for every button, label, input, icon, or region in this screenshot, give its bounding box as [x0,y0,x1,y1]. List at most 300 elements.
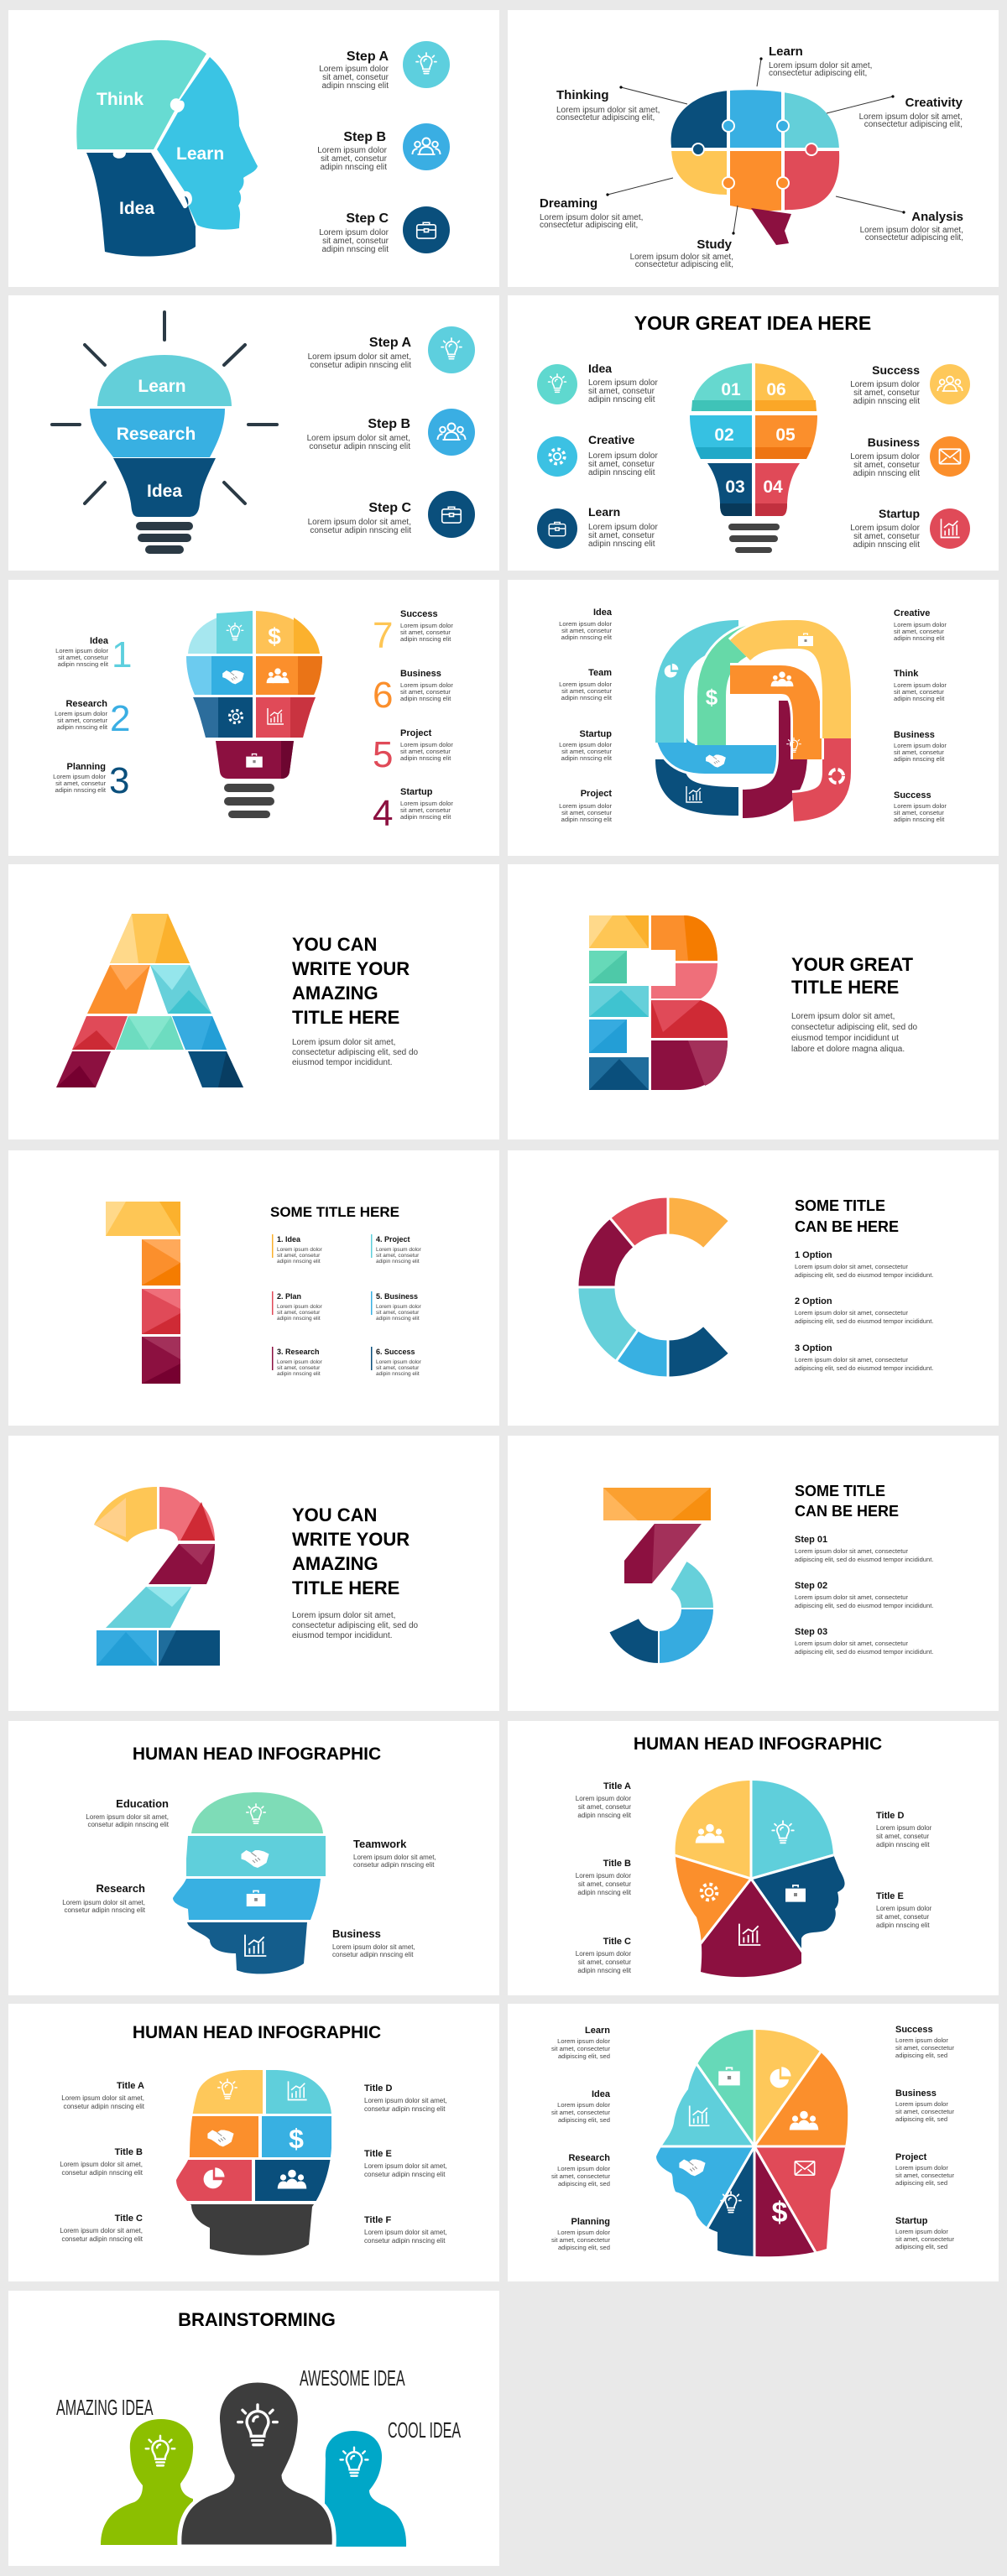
labels right: Business [894,730,935,740]
bulb rays [52,312,277,503]
labels left: adipin nnscing elit [577,1889,632,1896]
item 7 Success: adipin nnscing elit [400,635,451,643]
headline: YOU CAN [292,1504,377,1525]
label: Thinking: consectetur adipiscing elit, [556,113,655,123]
labels right: sit amet, consetur [894,688,944,696]
label: Dreaming: consectetur adipiscing elit, [540,221,638,230]
item 3 Planning: 3 [109,760,129,801]
label Research: Research [96,1882,145,1895]
step A: Lorem ipsum dolor sit amet, [308,352,411,362]
step C: Step C [346,211,389,226]
labels right: sit amet, consectetur [895,2108,955,2115]
label: Study: Study [697,237,733,252]
steps: Step 03 [795,1627,827,1637]
options: adipiscing elit, sed do eiusmod tempor incididunt. [795,1317,933,1325]
item 4 Startup: adipin nnscing elit [400,813,451,821]
list items: Lorem ipsum dolor [376,1247,422,1253]
labels left: Title B [115,2147,143,2157]
panel: letter A [8,864,499,1139]
item 2 Research: 2 [110,698,130,739]
tiled bulb: $ [268,623,281,649]
headline: TITLE HERE [292,1577,399,1598]
numbered bulb: 02 [714,425,734,445]
label Business: Lorem ipsum dolor sit amet, [332,1943,415,1951]
labels left: sit amet, consectetur [551,2236,610,2244]
list items: adipin nnscing elit [277,1259,321,1265]
labels left: adipin nnscing elit [577,1812,632,1819]
item 3 Planning: sit amet, consetur [55,780,106,787]
steps: Lorem ipsum dolor sit amet, consectetur [795,1547,909,1555]
labels left: Lorem ipsum dolor [557,2229,610,2236]
head pie [675,1781,845,1977]
list items: adipin nnscing elit [277,1316,321,1322]
label: Dreaming: Lorem ipsum dolor sit amet, [540,213,643,222]
list items: sit amet, consetur [376,1310,420,1316]
list items: 5. Business [376,1292,418,1301]
label Education: consetur adipin nnscing elit [87,1821,170,1828]
labels left: Lorem ipsum dolor [576,1795,631,1802]
labels left: Lorem ipsum dolor [559,741,612,748]
labels right: Lorem ipsum dolor [894,742,947,749]
labels left: adipin nnscing elit [561,694,613,701]
item 1 Idea: 1 [112,634,132,675]
item 6 Business: sit amet, consetur [400,688,451,696]
label: Thinking [556,86,687,123]
steps: adipiscing elit, sed do eiusmod tempor incididunt. [795,1556,933,1563]
labels left: adipin nnscing elit [561,816,613,823]
body text: consectetur adipiscing elit, sed do [791,1023,918,1032]
list items: Lorem ipsum dolor [277,1304,323,1310]
item 6 Business: 6 [373,675,393,716]
headline: TITLE HERE [292,1007,399,1028]
labels left: sit amet, consetur [578,1803,631,1811]
labels left: Team [588,668,612,678]
labels left: adipin nnscing elit [561,754,613,762]
labels left: Idea [592,2089,611,2099]
body text: Lorem ipsum dolor sit amet, [292,1611,395,1620]
list items: adipin nnscing elit [376,1371,420,1377]
letter A mosaic [56,914,243,1087]
list items: sit amet, consetur [277,1310,321,1316]
title: YOUR GREAT IDEA HERE [634,312,871,334]
labels right: Lorem ipsum dolor [894,681,947,689]
bulb: Research [117,425,196,444]
label: Creativity: consectetur adipiscing elit, [864,120,963,129]
body text: Lorem ipsum dolor sit amet, [791,1012,895,1021]
labels right: Think [894,669,919,679]
step A: consetur adipin nnscing elit [310,361,411,370]
options: Lorem ipsum dolor sit amet, consectetur [795,1263,909,1270]
item 6 Business: adipin nnscing elit [400,695,451,702]
headline: YOU CAN [292,934,377,955]
body text [292,1611,419,1640]
item 1 Idea: adipin nnscing elit [58,660,109,668]
labels right: Lorem ipsum dolor [895,2164,948,2172]
headline: CAN BE HERE [795,1503,899,1520]
item: Idea: adipin nnscing elit [588,395,655,404]
labels left: sit amet, consetur [578,1958,631,1966]
labels left: Startup [579,729,612,739]
bulb [90,355,232,554]
labels left: adipiscing elit, sed [558,2116,610,2124]
item 5 Project: sit amet, consetur [400,748,451,755]
body text: labore et dolore magna aliqua. [791,1045,905,1054]
body text: eiusmod tempor incididunt. [292,1631,393,1640]
list items: sit amet, consetur [376,1365,420,1371]
labels right: adipin nnscing elit [894,816,945,823]
item: Learn: adipin nnscing elit [588,540,655,549]
item 1 Idea: Lorem ipsum dolor [55,647,108,654]
labels left: Lorem ipsum dolor sit amet, [61,2094,144,2102]
step C: adipin nnscing elit [322,245,389,254]
head puzzle [76,40,258,257]
labels right: Project [895,2152,927,2162]
item: Startup: Startup [879,507,920,520]
label Teamwork: Lorem ipsum dolor sit amet, [353,1854,436,1861]
label: Creativity: Lorem ipsum dolor sit amet, [859,112,963,122]
number 1 mosaic [106,1202,180,1384]
options: Lorem ipsum dolor sit amet, consectetur [795,1356,909,1364]
label: Thinking: Lorem ipsum dolor sit amet, [556,106,660,115]
labels left: Title B [603,1859,631,1869]
labels left: adipiscing elit, sed [558,2180,610,2188]
item 7 Success: 7 [373,615,393,656]
list items: sit amet, consetur [277,1365,321,1371]
list items: Lorem ipsum dolor [277,1359,323,1365]
head pie [656,2030,848,2257]
label: Analysis: Analysis [911,210,963,224]
labels left: Title C [115,2214,143,2224]
labels left: Lorem ipsum dolor [576,1872,631,1880]
item: Business: Business [868,435,920,449]
headline [795,1483,899,1520]
item 6 Business: Lorem ipsum dolor [400,681,453,689]
item 5 Project: 5 [373,734,393,775]
labels right: Business [895,2088,937,2099]
title: HUMAN HEAD INFOGRAPHIC [133,2023,381,2042]
labels right: Lorem ipsum dolor [876,1824,932,1832]
bulb: Learn [138,377,186,396]
list items: sit amet, consetur [277,1253,321,1259]
labels right: sit amet, consetur [876,1833,929,1840]
labels right: sit amet, consetur [894,748,944,756]
panel: human head bands [8,1721,499,1995]
step A: sit amet, consetur [322,73,389,82]
label: awesome idea: AWESOME IDEA [300,2365,405,2391]
options: adipiscing elit, sed do eiusmod tempor incididunt. [795,1364,933,1372]
labels right: adipiscing elit, sed [895,2243,947,2250]
steps: Step 01 [795,1535,827,1545]
list items: Lorem ipsum dolor [376,1304,422,1310]
step C: sit amet, consetur [322,237,389,246]
labels left [551,2026,611,2251]
item 7 Success: sit amet, consetur [400,628,451,636]
item 4 Startup: Lorem ipsum dolor [400,800,453,807]
labels right: Creative [894,608,930,618]
headline [795,1197,899,1235]
title: SOME TITLE HERE [270,1204,399,1220]
labels left [559,607,613,823]
labels left: consetur adipin nnscing elit [61,2169,143,2177]
item: Learn: Learn [588,505,620,519]
labels left: Lorem ipsum dolor [557,2037,610,2045]
item 4 Startup: 4 [373,793,393,834]
letter B mosaic [589,915,728,1090]
labels right [894,608,947,823]
labels right [895,2025,955,2250]
labels right: Lorem ipsum dolor sit amet, [364,2097,447,2104]
labels left: sit amet, consectetur [551,2045,610,2052]
head: dark [180,2380,334,2547]
label Education: Education [116,1797,169,1810]
labels right: Success [895,2025,933,2035]
labels right [876,1811,932,1929]
label Teamwork: Teamwork [353,1838,407,1850]
labels right: Title D [364,2083,392,2094]
labels right: Lorem ipsum dolor [894,621,947,628]
headline: AMAZING [292,983,378,1004]
item: Learn [537,505,658,549]
steps: Lorem ipsum dolor sit amet, consectetur [795,1640,909,1647]
item 4 Startup: Startup [400,787,433,797]
panel: letter B [508,864,999,1139]
panel: number 1 [8,1150,499,1426]
item: Learn: Lorem ipsum dolor [588,523,658,532]
labels left: sit amet, consetur [561,627,612,634]
labels right: Title F [364,2215,391,2225]
label: amazing idea: AMAZING IDEA [56,2395,154,2420]
labels right: adipin nnscing elit [894,755,945,763]
panel: woven knot [508,580,999,856]
item: Idea: Idea [588,362,612,375]
label: Analysis: consectetur adipiscing elit, [865,233,963,242]
step B: adipin nnscing elit [321,163,387,172]
number 2 mosaic [94,1487,220,1666]
label Teamwork [353,1838,436,1869]
labels right: sit amet, consetur [894,809,944,816]
panel: human head grid [8,2004,499,2281]
item 7 Success: Success [400,609,438,619]
labels right: Lorem ipsum dolor [876,1905,932,1912]
label: Study [630,206,738,269]
labels right: Lorem ipsum dolor [895,2228,948,2235]
labels left: Lorem ipsum dolor [559,620,612,628]
labels left: adipin nnscing elit [561,634,613,641]
labels left: Title A [603,1781,631,1791]
label: Thinking: Thinking [556,88,609,102]
steps: Lorem ipsum dolor sit amet, consectetur [795,1593,909,1601]
step C: Lorem ipsum dolor sit amet, [308,518,411,527]
labels right [364,2083,447,2245]
panel: letter C [508,1150,999,1426]
steps: adipiscing elit, sed do eiusmod tempor incididunt. [795,1648,933,1656]
panel: your great idea bulb [508,295,999,571]
item 7 Success: Lorem ipsum dolor [400,622,453,629]
item: Success: Success [872,363,920,377]
list items: 6. Success [376,1348,415,1356]
labels left: Project [581,789,612,799]
bulb: Idea [147,482,182,501]
headline [292,934,410,1028]
head: green [101,2419,193,2545]
label: cool idea: COOL IDEA [388,2417,462,2443]
labels right: sit amet, consectetur [895,2235,955,2243]
body text: eiusmod tempor incididunt ut [791,1034,899,1043]
labels right: adipiscing elit, sed [895,2115,947,2123]
body text [791,1012,918,1054]
headline: TITLE HERE [791,977,899,998]
item: Success: adipin nnscing elit [853,397,920,406]
item 5 Project [373,728,453,775]
item: Creative: Lorem ipsum dolor [588,451,658,461]
numbered bulb: 03 [725,477,745,497]
labels right: adipin nnscing elit [894,695,945,702]
body text: Lorem ipsum dolor sit amet, [292,1038,395,1047]
letter C ring [577,1197,730,1378]
step A: adipin nnscing elit [322,81,389,91]
labels left: sit amet, consectetur [551,2172,610,2180]
labels left: sit amet, consectetur [551,2109,610,2116]
item 3 Planning [53,760,129,801]
item 2 Research: sit amet, consetur [57,717,107,724]
headline: WRITE YOUR [292,1529,410,1550]
labels right: Title D [876,1811,904,1821]
item 1 Idea: Idea [90,636,109,646]
labels right: Title E [364,2149,392,2159]
head: blue [324,2431,406,2547]
item: Startup: Lorem ipsum dolor [850,524,921,533]
list items: adipin nnscing elit [376,1316,420,1322]
label Business: Business [332,1927,381,1940]
numbered bulb: 01 [721,380,741,399]
list items: Lorem ipsum dolor [277,1247,323,1253]
options: 1 Option [795,1250,832,1260]
item: Success: sit amet, consetur [853,388,921,398]
labels left: sit amet, consetur [561,687,612,695]
item 5 Project: Project [400,728,432,738]
item: Learn: sit amet, consetur [588,531,655,540]
item 3 Planning: Lorem ipsum dolor [53,773,106,780]
number 3 mosaic [603,1488,714,1664]
labels right: adipiscing elit, sed [895,2179,947,2187]
item 3 Planning: adipin nnscing elit [55,786,107,794]
panel: seven step bulb [8,580,499,856]
item: Business: Lorem ipsum dolor [850,452,921,461]
labels left: Lorem ipsum dolor sit amet, [60,2161,143,2168]
options: Lorem ipsum dolor sit amet, consectetur [795,1309,909,1317]
head grid [176,2070,331,2255]
numbered bulb: 05 [775,425,796,445]
body text: consectetur adipiscing elit, sed do [292,1621,419,1630]
headline: SOME TITLE [795,1483,885,1499]
label: Study: Lorem ipsum dolor sit amet, [630,253,733,262]
head puzzle: Learn [176,144,224,164]
label Education: Lorem ipsum dolor sit amet, [86,1813,169,1821]
headline: YOUR GREAT [791,954,914,975]
labels left: consetur adipin nnscing elit [63,2103,145,2110]
labels left: Title C [603,1937,631,1947]
labels left: consetur adipin nnscing elit [61,2235,143,2243]
label: Learn: Learn [769,44,803,59]
label Research: Lorem ipsum dolor sit amet, [62,1899,145,1906]
panel: human head eight wedges [508,2004,999,2281]
headline: CAN BE HERE [795,1218,899,1235]
label Business: consetur adipin nnscing elit [332,1951,414,1958]
numbered bulb: 06 [766,380,786,399]
list items [272,1234,422,1377]
item 6 Business [373,669,453,716]
body text: consectetur adipiscing elit, sed do [292,1048,419,1057]
labels right: Startup [895,2216,928,2226]
labels right: Lorem ipsum dolor sit amet, [364,2229,447,2236]
list items: adipin nnscing elit [376,1259,420,1265]
list items: Lorem ipsum dolor [376,1359,422,1365]
step A: Lorem ipsum dolor [319,65,389,74]
labels left: sit amet, consetur [578,1880,631,1888]
step B: Step B [368,417,410,431]
labels right: Lorem ipsum dolor sit amet, [364,2162,447,2170]
steps: adipiscing elit, sed do eiusmod tempor incididunt. [795,1602,933,1609]
title: BRAINSTORMING [178,2309,336,2330]
labels left: sit amet, consetur [561,748,612,755]
options: adipiscing elit, sed do eiusmod tempor incididunt. [795,1271,933,1279]
labels right: Lorem ipsum dolor [895,2100,948,2108]
labels left: sit amet, consetur [561,809,612,816]
step B: Lorem ipsum dolor sit amet, [307,434,410,443]
item: Business [850,435,970,478]
labels right: consetur adipin nnscing elit [364,2105,446,2113]
step C [308,491,475,538]
item 1 Idea: sit amet, consetur [58,654,108,661]
item 2 Research: Research [65,699,107,709]
item: Creative: sit amet, consetur [588,460,655,469]
options: 2 Option [795,1296,832,1306]
knot icons: $ [706,685,718,710]
labels right: consetur adipin nnscing elit [364,2171,446,2178]
item 2 Research [55,698,130,739]
body text: eiusmod tempor incididunt. [292,1058,393,1067]
labels left: Title A [117,2081,144,2091]
item 5 Project: adipin nnscing elit [400,754,451,762]
panel: light bulb steps [8,295,499,571]
item: Business: adipin nnscing elit [853,469,920,478]
body text [292,1038,419,1067]
step A [319,41,450,91]
labels left: Lorem ipsum dolor sit amet, [60,2227,143,2234]
labels right: sit amet, consectetur [895,2172,955,2179]
list items: 3. Research [277,1348,320,1356]
labels left: Lorem ipsum dolor [559,802,612,810]
labels right: Success [894,790,931,800]
label Research [62,1882,146,1914]
numbered bulb: 04 [763,477,783,497]
brain puzzle [671,90,839,245]
panel: human head five wedges [508,1721,999,1995]
numbered bulb [690,363,817,553]
labels left: Lorem ipsum dolor [557,2101,610,2109]
labels left: Planning [571,2217,610,2227]
step B: Lorem ipsum dolor [317,146,388,155]
tiled bulb [186,611,322,818]
steps [795,1535,933,1656]
labels left: adipin nnscing elit [577,1967,632,1974]
item: Startup: sit amet, consetur [853,532,921,541]
labels left: Idea [593,607,613,618]
item 4 Startup [373,787,453,834]
list items: sit amet, consetur [376,1253,420,1259]
label: Dreaming [540,178,673,230]
labels right: Lorem ipsum dolor [894,802,947,810]
